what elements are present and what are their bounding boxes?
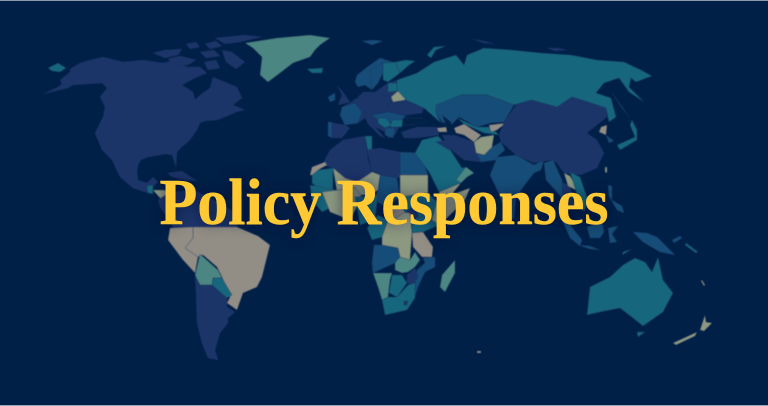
Europe	[328, 58, 424, 138]
South America	[158, 190, 270, 360]
map: countries	[43, 35, 712, 360]
title shadow: Policy Responses	[160, 166, 608, 239]
Central America	[147, 185, 172, 204]
Russian Arctic islands	[427, 39, 567, 58]
Southeast Asia and Pacific	[563, 185, 698, 255]
title: Policy Responses	[160, 166, 608, 239]
Kola peninsula	[395, 60, 415, 73]
New Zealand	[477, 280, 712, 353]
Iceland	[307, 68, 323, 73]
Asia	[401, 92, 637, 222]
North America	[43, 35, 262, 193]
Greenland	[245, 35, 330, 82]
Australia	[587, 257, 673, 326]
Russia	[397, 48, 652, 123]
Alaska highlight	[48, 63, 66, 72]
inland water	[402, 115, 452, 137]
Svalbard	[362, 40, 383, 45]
Africa	[310, 136, 470, 315]
Tasmania	[637, 332, 645, 337]
